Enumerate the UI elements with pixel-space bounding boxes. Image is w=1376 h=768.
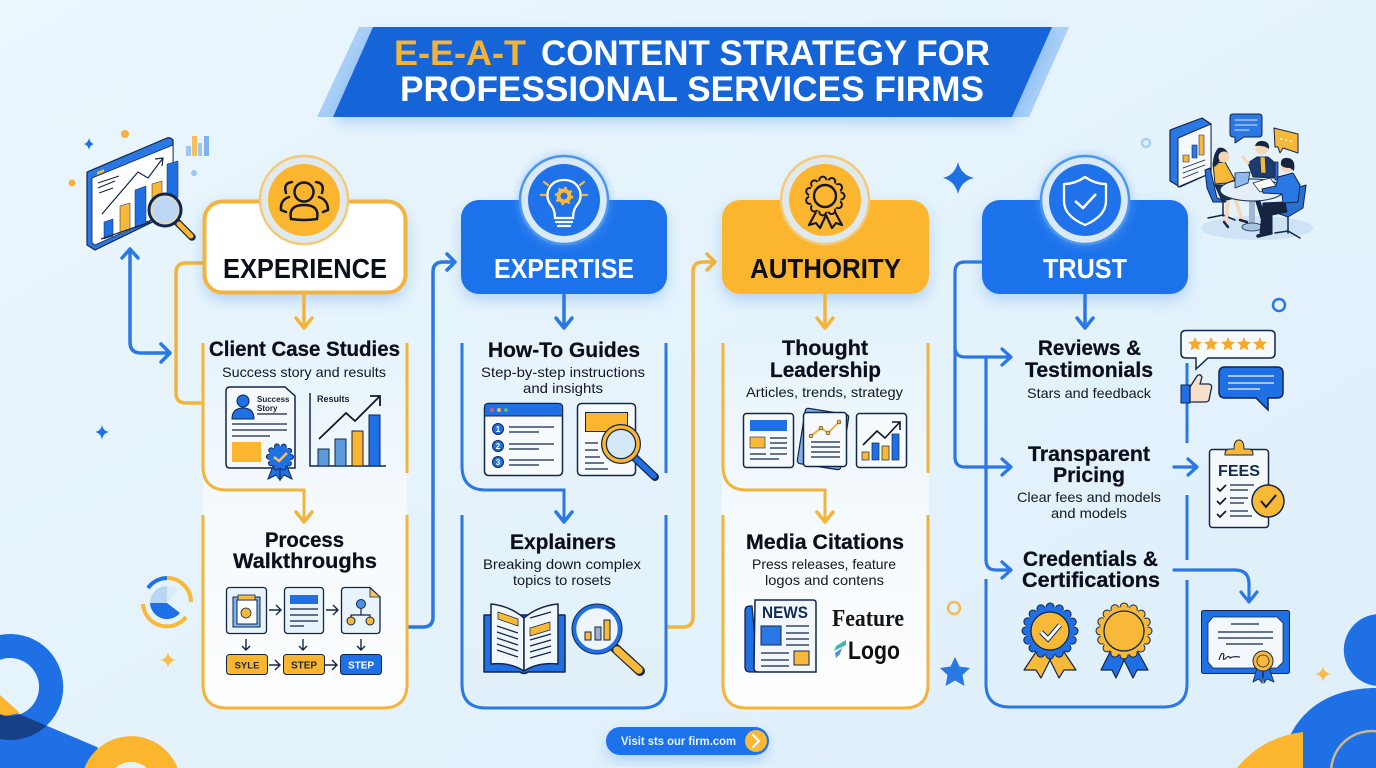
icon: article card (744, 414, 794, 468)
heading: thought leadership: Leadership (770, 359, 881, 382)
text: how-to description: Step-by-step instructions (481, 364, 645, 380)
illustration: man from behind (1258, 158, 1306, 238)
header card: trust: TRUST (1043, 253, 1127, 284)
frame: process walkthroughs (203, 515, 407, 708)
panel: expertise column (461, 156, 715, 708)
icon: gold medal (1100, 607, 1148, 678)
heading: reviews and testimonials: Testimonials (1025, 359, 1153, 382)
arrow: to explainers (556, 512, 572, 522)
icon: numbered checklist window: 1 (496, 425, 501, 434)
heading: reviews and testimonials: Reviews & (1038, 337, 1141, 360)
icon: certificate (1202, 610, 1290, 683)
icon: numbered checklist window: 3 (496, 458, 501, 467)
icon: success story document (226, 387, 295, 480)
icon: blue medal with check (1024, 607, 1076, 678)
header card: authority (722, 200, 929, 294)
text: pricing description: and models (1051, 505, 1127, 521)
icon: lightbulb medallion (520, 156, 608, 244)
frame: how-to guides (462, 343, 564, 520)
title text: CONTENT STRATEGY FOR (541, 34, 990, 73)
frame: explainers (462, 515, 666, 708)
icon: document with magnifier (578, 404, 655, 477)
icon: fees clipboard: FEES (1218, 463, 1260, 480)
header card: experience (204, 202, 406, 292)
icon: numbered checklist window (484, 404, 562, 476)
heading: thought leadership (770, 337, 881, 382)
heading: media citations: Media Citations (746, 531, 904, 554)
decoration: mini bars (186, 136, 209, 156)
panel background: expertise (461, 343, 667, 708)
icon: process flow: STEP (291, 660, 317, 672)
header card: expertise (461, 200, 667, 294)
icon: results chart (310, 393, 386, 466)
frame: thought leadership (723, 343, 825, 520)
decoration: bottom-left shapes (0, 634, 178, 768)
button: visit our firm: Visit sts our firm.com (621, 734, 736, 748)
icon: process flow: SYLE (235, 660, 259, 672)
heading: credentials and certifications: Credentials & (1023, 548, 1158, 571)
heading: credentials and certifications: Certifications (1022, 569, 1160, 592)
illustration: seated woman (1205, 148, 1247, 227)
heading: process walkthroughs: Process (265, 529, 344, 552)
decoration: bottom-right shapes (1237, 614, 1376, 768)
illustration: chat bubbles (1230, 114, 1298, 153)
frame: client case studies (203, 343, 304, 520)
title text: PROFESSIONAL SERVICES FIRMS (400, 70, 984, 109)
icon: rosette medallion (781, 156, 869, 244)
decoration: donut chart (143, 578, 191, 626)
frame: trust panel (986, 363, 1187, 707)
text: explainers description (483, 556, 641, 588)
icon: success story document: Success (257, 395, 290, 404)
icon: success story document: Story (257, 404, 278, 413)
frame: media citations (723, 515, 928, 708)
text: how-to description: and insights (523, 380, 603, 396)
arrow: to media citations (817, 512, 833, 522)
heading: transparent pricing: Transparent (1028, 443, 1150, 466)
header card: experience: EXPERIENCE (223, 253, 387, 284)
text: explainers description: Breaking down complex (483, 556, 641, 572)
logo: brand mark and wordmark: Logo (848, 637, 900, 665)
title text (394, 34, 990, 109)
arrow: experience to next column (408, 254, 455, 627)
heading: transparent pricing (1028, 443, 1150, 487)
button: visit our firm (606, 727, 769, 755)
heading: thought leadership: Thought (782, 337, 868, 360)
panel background: authority (722, 343, 929, 708)
header card: authority: AUTHORITY (750, 253, 901, 284)
icon: stacked trend report (797, 408, 849, 470)
icon: results chart: Results (317, 394, 350, 404)
panel: trust column (955, 156, 1290, 707)
icon: trend bars card (856, 414, 906, 468)
title text: E-E-A-T (394, 34, 526, 73)
arrow: authority down (817, 295, 833, 328)
icon: process flow: STEP (348, 660, 374, 672)
top-left icon: analytics browser with magnifier (87, 138, 192, 250)
heading: credentials and certifications (1022, 548, 1160, 592)
text: media citations description (752, 556, 896, 588)
text: how-to description (481, 364, 645, 396)
arrow: to process walkthroughs (296, 512, 312, 522)
text: pricing description: Clear fees and models (1017, 489, 1161, 505)
illustration: business meeting (1170, 114, 1313, 240)
heading: process walkthroughs (233, 529, 377, 573)
icon: magnifier with chart (572, 604, 640, 671)
icon: fees clipboard (1210, 440, 1284, 528)
logo: brand mark and wordmark (834, 637, 900, 665)
text: thought leadership description: Articles, trends, strategy (746, 384, 903, 400)
text: pricing description (1017, 489, 1161, 521)
text: reviews description: Stars and feedback (1027, 385, 1152, 401)
icon: people medallion (260, 156, 348, 244)
icon: numbered checklist window: 2 (496, 442, 501, 451)
icon: newspaper (745, 600, 816, 672)
heading: transparent pricing: Pricing (1053, 464, 1125, 487)
icon: star review bubbles with thumb (1181, 330, 1283, 410)
heading: explainers: Explainers (510, 531, 616, 554)
decoration: sparkles, stars and dots (68, 130, 1331, 686)
connector: experience loop (176, 263, 203, 403)
arrow: experience down (296, 295, 312, 328)
text: media citations description: logos and contens (765, 572, 884, 588)
icon: process flow (226, 588, 382, 674)
title banner (317, 27, 1069, 117)
heading: client case studies: Client Case Studies (209, 338, 400, 361)
heading: how-to guides: How-To Guides (488, 339, 640, 362)
arrow: expertise down (556, 295, 572, 328)
arrow: trust down (1077, 295, 1093, 328)
heading: process walkthroughs: Walkthroughs (233, 550, 377, 573)
panel background: experience (203, 343, 407, 708)
header card: expertise: EXPERTISE (494, 253, 634, 284)
connector: trust branches (955, 262, 1257, 602)
arrow: expertise to authority (668, 254, 715, 627)
panel: authority column (722, 156, 929, 708)
illustration: man in suit (1243, 141, 1278, 218)
illustration: report book (1170, 118, 1211, 187)
icon: open book (484, 604, 565, 674)
panel: experience column (176, 156, 455, 708)
illustration: table with laptop (1220, 172, 1284, 231)
text: feature wordmark: Feature (832, 606, 904, 632)
text: client case studies description: Success story and results (222, 364, 386, 380)
text: media citations description: Press releases, feature (752, 556, 896, 572)
icon: newspaper: NEWS (762, 603, 808, 622)
text: explainers description: topics to rosets (513, 572, 611, 588)
icon: shield medallion (1041, 156, 1129, 244)
heading: reviews and testimonials (1025, 337, 1153, 382)
header card: trust (982, 200, 1188, 294)
arrow: analytics to client case studies (122, 249, 170, 362)
